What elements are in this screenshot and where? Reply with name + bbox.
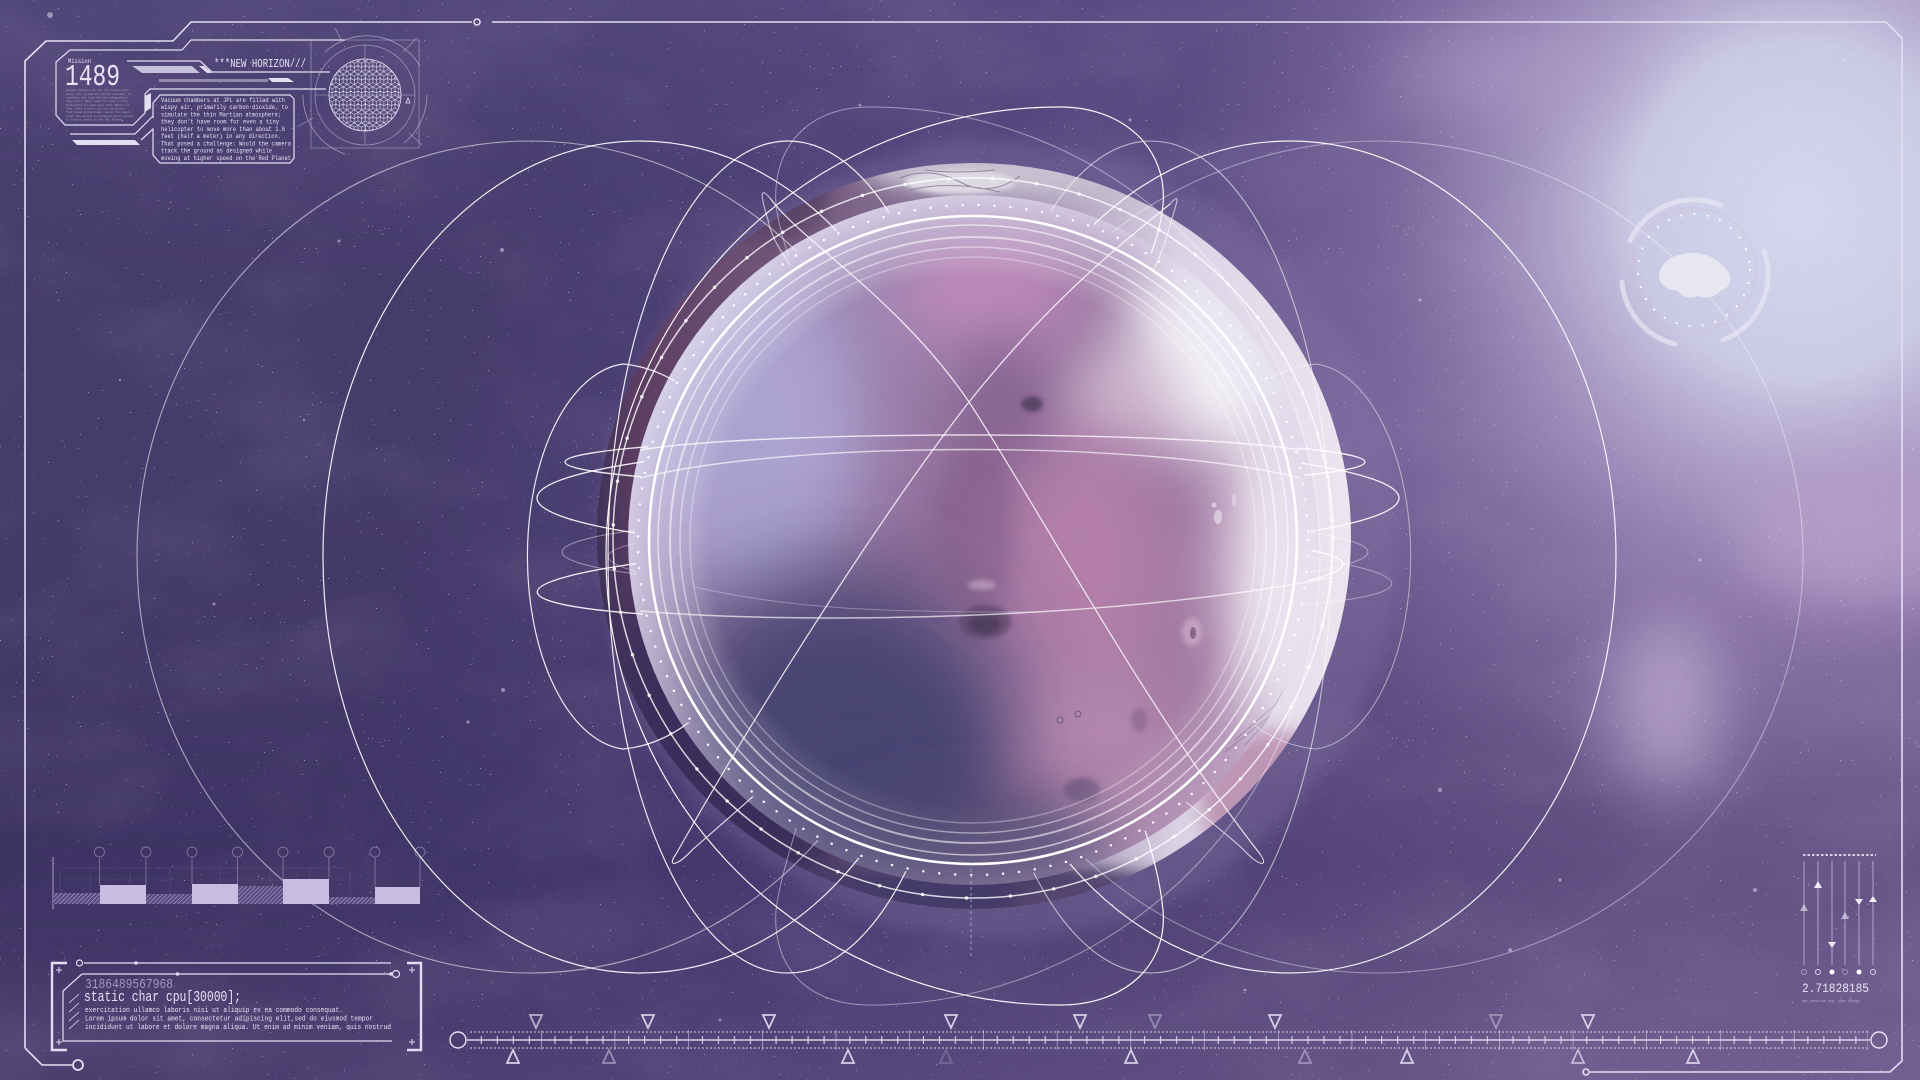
code lines: incididunt ut labore et dolore magna aliqua. Ut enim ad minim veniam, quis nostrud (85, 1024, 391, 1032)
tiny mission text: That posed a challenge: Would the camera (66, 110, 131, 114)
ring arcs across lens (640, 435, 1333, 618)
triangle lines crossing the planet (676, 193, 1260, 854)
code lines: exercitation ullamco laboris nisi ut aliquip ex ea commodo consequat. (85, 1007, 343, 1015)
lens disc with surface colours (628, 195, 1345, 900)
tiny mission text: simulate the thin Martian atmosphere; (66, 96, 129, 100)
planet glow halo (602, 142, 1398, 938)
tiny mission text: Vacuum chambers at JPL are filled with (66, 88, 129, 92)
hud rings over planet (613, 178, 1333, 957)
stems with value nodes (94, 847, 425, 887)
concentric rings (649, 216, 1297, 864)
tiny mission text: at higher speed on the Red Planet (66, 118, 122, 122)
panel outlines (56, 40, 345, 163)
up markers (507, 1050, 1699, 1063)
gauge caption: ant question exp, your things (1802, 999, 1860, 1004)
orbit ring with nodes (613, 178, 1333, 898)
tiny mission text: wispy air, primarily carbon dioxide, to (66, 92, 131, 96)
mission label: Mission (68, 58, 91, 65)
icon: geodesic globe reticle (297, 28, 427, 154)
tiny mission text: they don't have room for even a tiny (66, 99, 128, 103)
brain scanner widget (1622, 200, 1768, 344)
timeline end caps (450, 1032, 466, 1048)
planet (570, 140, 1398, 960)
centre dashed axis (970, 863, 972, 957)
bar chart (53, 847, 425, 909)
code heading: static char cpu[30000]; (84, 990, 241, 1006)
description paragraph: they don't have room for even a tiny (161, 119, 279, 126)
description paragraph: helicopter to move more than about 1.6 (161, 126, 285, 133)
description paragraph: simulate the thin Martian atmosphere; (161, 112, 281, 118)
icon: brain (1659, 253, 1730, 298)
code lines: Lorem ipsum dolor sit amet, consectetur adipiscing elit,sed do eiusmod tempor (85, 1016, 373, 1024)
top-left mission panel (56, 28, 427, 163)
bottom-left code panel (52, 960, 421, 1050)
dotted ring (638, 205, 1308, 875)
brackets and rules (52, 960, 421, 1050)
tiny mission text: feet (half a meter) in any direction. (66, 106, 126, 110)
solid bars (100, 879, 420, 904)
code lines (85, 1007, 391, 1032)
gauge value: 2.71828185 (1802, 981, 1869, 996)
description paragraph: wispy air, primarily carbon dioxide, to (161, 104, 288, 111)
mission title: ***NEW HORIZON/// (214, 57, 306, 71)
code serial: 3186489567968 (85, 977, 173, 993)
tiny mission text (66, 88, 133, 122)
description paragraph: feet (half a meter) in any direction. (161, 133, 281, 140)
description paragraph: track the ground as designed while (161, 148, 272, 155)
timeline ruler (450, 1015, 1887, 1063)
description paragraph: That posed a challenge: Would the camera (161, 140, 291, 148)
slider gauge (1800, 855, 1877, 1004)
down markers (530, 1015, 1594, 1028)
description paragraph: moving at higher speed on the Red Planet (161, 155, 291, 162)
decorative bars (72, 66, 294, 145)
orbit ellipses around planet (137, 107, 1803, 1005)
description paragraph (161, 97, 291, 162)
description paragraph: Vacuum chambers at JPL are filled with (161, 97, 285, 104)
planet shading and polar cap (610, 163, 1299, 909)
planet back disc (597, 163, 1351, 909)
tiny mission text: track the ground as designed while moving (66, 114, 133, 118)
hatched bars (53, 886, 375, 904)
dark surface marks and craters (959, 396, 1297, 802)
mission number: 1489 (65, 60, 120, 95)
tiny mission text: helicopter to move more than about 1.6 (66, 103, 129, 107)
